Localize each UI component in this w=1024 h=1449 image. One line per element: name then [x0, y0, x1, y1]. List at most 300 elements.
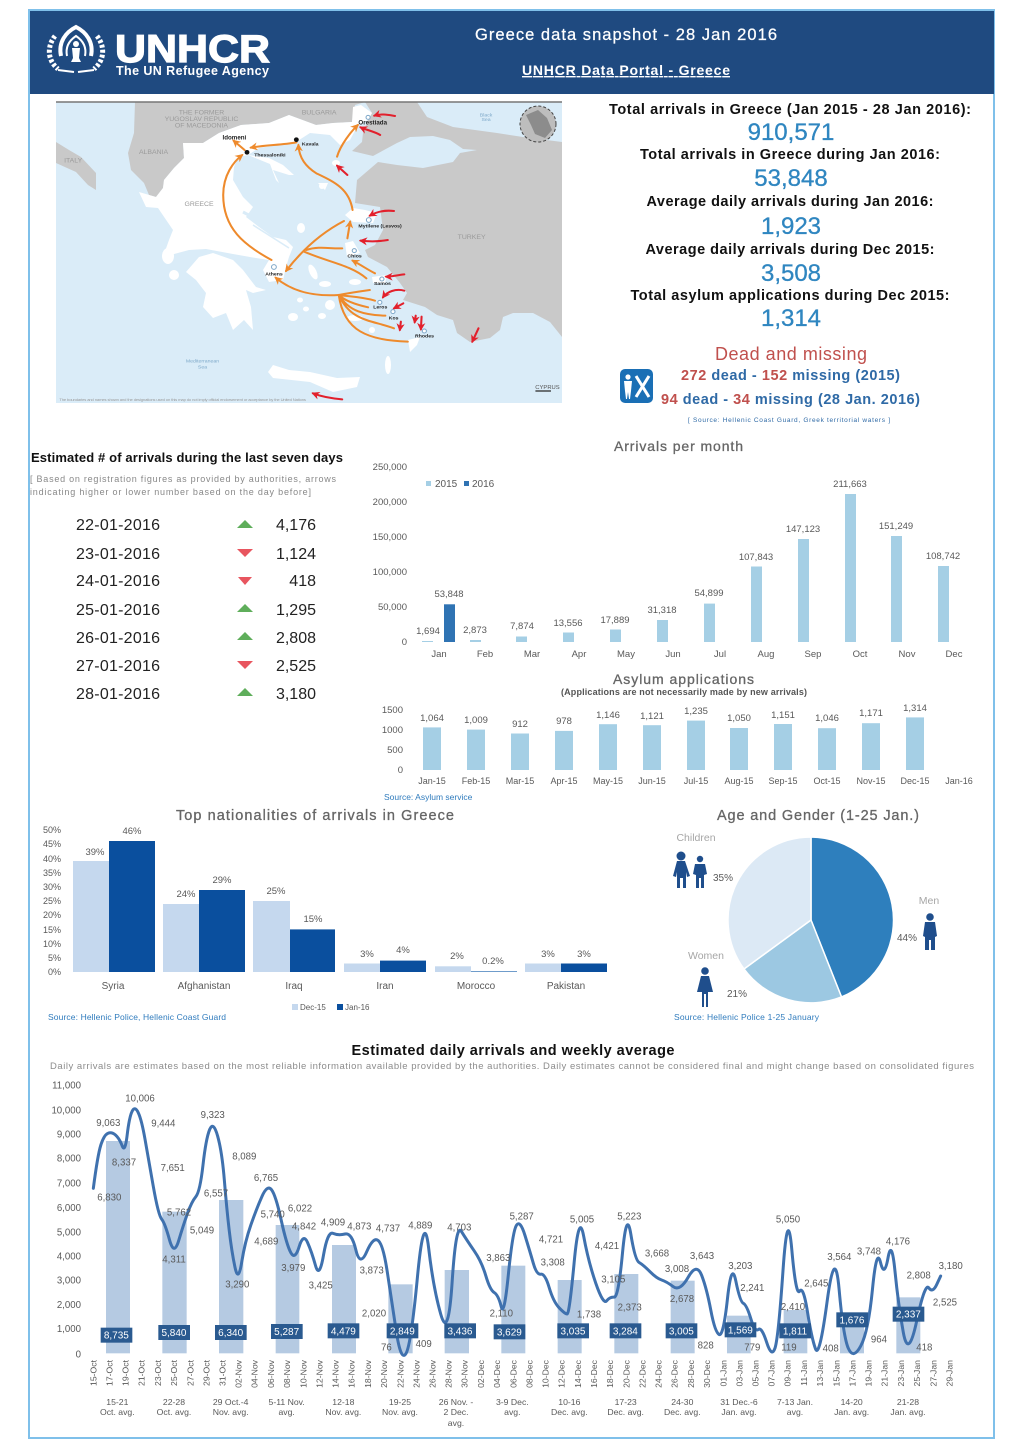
women label: Women — [688, 950, 724, 962]
average daily arrivals Jan 2016: 1,923 — [761, 213, 821, 240]
daily value labels: 1,738 — [577, 1309, 601, 1320]
month labels: Apr — [572, 649, 586, 660]
table rows: 1,124 — [276, 546, 316, 563]
date axis labels: 18-Dec — [605, 1359, 615, 1388]
month labels: Jul — [714, 649, 726, 660]
weekly axis labels: 14-20 — [841, 1397, 863, 1407]
asylum value labels: 1,146 — [596, 710, 620, 721]
daily value labels: 828 — [698, 1340, 714, 1351]
daily value labels: 5,762 — [167, 1207, 191, 1218]
daily value labels: 408 — [823, 1343, 839, 1354]
icon: UNHCR logo — [49, 27, 103, 72]
table rows: 22-01-2016 — [76, 517, 160, 534]
nationalities value labels: 29% — [212, 875, 232, 886]
weekly axis labels: 31 Dec.-6 — [720, 1397, 758, 1407]
total arrivals Jan 2016: 53,848 — [754, 165, 828, 192]
dead and missing block — [620, 344, 920, 424]
table rows: 23-01-2016 — [76, 546, 160, 563]
nationalities value labels — [85, 826, 591, 967]
weekly average values: 5,840 — [161, 1328, 187, 1339]
nationalities y axis: 20% — [43, 910, 61, 920]
asylum month labels — [418, 776, 973, 786]
nationalities y axis: 30% — [43, 882, 61, 892]
daily value labels: 418 — [916, 1342, 932, 1353]
nationalities value labels: 2% — [450, 951, 464, 962]
nationalities y axis: 45% — [43, 839, 61, 849]
date axis labels: 15-Jan — [831, 1360, 841, 1386]
date axis labels: 21-Jan — [880, 1360, 890, 1386]
dead and missing 2016: 94 dead - 34 missing (28 Jan. 2016) — [661, 392, 920, 408]
weekly axis labels: 5-11 Nov. — [269, 1397, 305, 1407]
legend — [426, 479, 495, 490]
date axis labels: 12-Dec — [557, 1359, 567, 1388]
route arrows and place names: Athens — [265, 271, 283, 277]
date axis labels: 16-Nov — [347, 1359, 357, 1388]
date axis labels: 07-Jan — [767, 1360, 777, 1386]
monthly value labels: 107,843 — [739, 552, 773, 563]
monthly value labels: 7,874 — [510, 621, 534, 632]
weekly average values: 5,287 — [274, 1327, 300, 1338]
weekly average values: 8,735 — [104, 1331, 129, 1342]
date axis labels: 28-Dec — [686, 1359, 696, 1388]
date axis labels: 08-Dec — [524, 1359, 534, 1388]
average daily arrivals Dec 2015: Average daily arrivals during Dec 2015: — [646, 242, 934, 258]
monthly value labels: 147,123 — [786, 524, 820, 535]
weekly axis labels: Oct. avg. — [100, 1407, 135, 1417]
table rows: 1,295 — [276, 602, 316, 619]
daily y axis: 8,000 — [57, 1153, 81, 1164]
asylum value labels: 978 — [556, 716, 572, 727]
daily y axis: 2,000 — [57, 1300, 81, 1311]
total arrivals since Jan 2015: 910,571 — [748, 119, 834, 146]
weekly axis labels: Oct. avg. — [157, 1407, 191, 1417]
table rows: 2,525 — [276, 658, 316, 675]
weekly average values: 4,479 — [331, 1326, 356, 1337]
arrivals chart title: Arrivals per month — [614, 438, 743, 454]
weekly axis labels: avg. — [278, 1407, 295, 1417]
chart heading: daily arrivals — [50, 1043, 974, 1072]
asylum month labels: May-15 — [593, 776, 623, 786]
men label: 44% — [897, 933, 917, 944]
nationalities category labels — [102, 981, 585, 992]
asylum month labels: Jan-15 — [418, 776, 446, 786]
weekly axis labels: 7-13 Jan. — [777, 1397, 813, 1407]
daily value labels: 3,873 — [360, 1265, 384, 1276]
weekly axis labels: 10-16 — [558, 1397, 581, 1407]
route arrows and place names: Sea — [198, 364, 207, 370]
nationalities y axis: 10% — [43, 939, 61, 949]
date axis labels: 14-Dec — [573, 1359, 583, 1388]
asylum month labels: Jan-16 — [945, 776, 973, 786]
y axis labels: 250,000 — [373, 462, 407, 473]
women label: 21% — [727, 989, 747, 1000]
y axis labels: 100,000 — [373, 567, 407, 578]
date axis labels: 31-Oct — [218, 1359, 228, 1386]
month labels: Nov — [899, 649, 916, 660]
weekly axis labels — [100, 1397, 926, 1428]
date axis labels: 08-Nov — [282, 1359, 292, 1388]
route arrows and place names: Black — [480, 113, 493, 119]
icon: man — [923, 913, 937, 950]
last seven days table — [30, 450, 343, 703]
daily value labels: 119 — [781, 1342, 797, 1353]
table rows: 28-01-2016 — [76, 686, 160, 703]
monthly bars — [422, 494, 949, 642]
daily value labels: 2,110 — [490, 1308, 513, 1319]
daily value labels: 5,049 — [190, 1226, 214, 1237]
route arrows and place names: YUGOSLAV REPUBLIC — [165, 116, 238, 123]
date axis labels: 24-Dec — [654, 1359, 664, 1388]
date axis labels: 23-Jan — [896, 1360, 906, 1386]
daily y axis: 6,000 — [57, 1203, 81, 1214]
route arrows and place names: Rhodes — [415, 333, 434, 339]
daily chart note: Daily arrivals are estimates based on the most reliable information available provided by the authorities. Daily estimates cannot be considered final and might change based on consolidated figures — [50, 1061, 974, 1072]
route arrows and place names: Idomeni — [223, 135, 247, 142]
weekly average values: 1,811 — [783, 1326, 808, 1337]
daily value labels: 3,105 — [601, 1274, 625, 1285]
daily value labels: 9,063 — [96, 1118, 120, 1129]
weekly average values: 2,337 — [896, 1310, 921, 1321]
weekly average values — [104, 1310, 921, 1342]
asylum y axis: 1000 — [382, 725, 403, 736]
weekly average values: 6,340 — [218, 1328, 244, 1339]
daily y axis — [51, 1081, 81, 1360]
trend arrows — [237, 520, 253, 696]
route arrows and place names: ITALY — [64, 158, 83, 165]
weekly axis labels: 12-18 — [332, 1397, 355, 1407]
month labels: Mar — [524, 649, 540, 660]
month labels: May — [617, 649, 635, 660]
weekly axis labels: 26 Nov. - — [439, 1397, 473, 1407]
weekly axis labels: Jan. avg. — [721, 1407, 757, 1417]
chart: asylum applications — [382, 671, 973, 802]
men label — [897, 895, 939, 944]
route arrows and place names: Mediterranean — [186, 359, 219, 365]
nationalities y axis: 0% — [48, 967, 61, 977]
Dec-15 bars — [73, 861, 561, 972]
weekly axis labels: 17-23 — [615, 1397, 637, 1407]
daily y axis: 3,000 — [57, 1276, 81, 1287]
weekly axis labels: Nov. avg. — [213, 1407, 249, 1417]
monthly value labels: 31,318 — [647, 605, 677, 616]
route arrows and place names — [59, 109, 560, 402]
route arrows and place names: ALBANIA — [139, 149, 169, 156]
daily y axis: 5,000 — [57, 1227, 81, 1238]
nationalities category labels: Iraq — [285, 981, 303, 992]
daily value labels: 4,421 — [595, 1241, 619, 1252]
nationalities value labels: 25% — [266, 886, 286, 897]
date axis labels: 19-Oct — [121, 1359, 131, 1386]
nationalities value labels: 15% — [303, 914, 323, 925]
daily value labels: 3,425 — [309, 1281, 333, 1292]
weekly axis labels: avg. — [448, 1418, 464, 1428]
daily value labels: 3,748 — [857, 1247, 881, 1258]
date axis labels: 06-Dec — [508, 1359, 518, 1388]
asylum month labels: Aug-15 — [724, 776, 754, 786]
nationalities value labels: 3% — [360, 949, 374, 960]
icon: dead and missing — [620, 369, 653, 403]
nationalities value labels: 0.2% — [482, 956, 504, 967]
asylum value labels: 1,046 — [815, 713, 839, 724]
y axis labels: 150,000 — [373, 532, 407, 543]
date axis labels: 16-Dec — [589, 1359, 599, 1388]
date axis labels: 22-Dec — [637, 1359, 647, 1388]
asylum value labels: 1,171 — [859, 708, 883, 719]
asylum applications Dec 2015: 1,314 — [761, 305, 821, 332]
date axis labels: 29-Jan — [944, 1360, 954, 1386]
date axis labels: 11-Jan — [799, 1360, 809, 1386]
nationalities value labels: 4% — [396, 945, 410, 956]
daily value labels: 3,643 — [690, 1251, 714, 1262]
y axis labels: 200,000 — [373, 497, 407, 508]
month labels — [431, 649, 963, 660]
daily value labels: 2,373 — [618, 1303, 642, 1314]
total arrivals since Jan 2015 — [609, 102, 971, 146]
asylum value labels: 912 — [512, 719, 528, 730]
date axis labels: 09-Jan — [783, 1360, 793, 1386]
weekly average values: 3,436 — [447, 1326, 473, 1337]
daily value labels: 964 — [871, 1335, 888, 1346]
weekly average values: 1,676 — [839, 1315, 865, 1326]
weekly average values: 3,005 — [669, 1326, 694, 1337]
daily value labels: 4,909 — [321, 1218, 345, 1229]
table heading: Estimated # of arrivals during the last seven days — [31, 450, 343, 465]
total arrivals since Jan 2015: Total arrivals in Greece (Jan 2015 - 28 Jan 2016): — [609, 102, 971, 118]
route arrows and place names: BULGARIA — [302, 109, 337, 116]
daily value labels: 4,689 — [254, 1237, 278, 1248]
weekly axis labels: Jan. avg. — [890, 1407, 926, 1417]
weekly average values: 1,569 — [728, 1325, 753, 1336]
daily value labels: 4,311 — [162, 1254, 186, 1265]
weekly average boxes — [101, 1307, 924, 1343]
route arrows and place names: Leros — [373, 304, 388, 310]
route arrows and place names: Thessaloniki — [254, 153, 286, 159]
daily value labels: 779 — [744, 1342, 760, 1353]
asylum value labels: 1,235 — [684, 706, 708, 717]
monthly value labels: 54,899 — [694, 588, 724, 599]
daily value labels: 4,873 — [347, 1221, 371, 1232]
header banner — [30, 11, 994, 94]
asylum month labels: Jul-15 — [684, 776, 708, 786]
weekly axis labels: avg. — [787, 1407, 803, 1417]
title: Greece data snapshot - 28 Jan 2016 — [475, 26, 777, 44]
asylum y axis: 500 — [387, 745, 403, 756]
route arrows and place names: CYPRUS — [535, 385, 560, 391]
nationalities y axis: 25% — [43, 896, 61, 906]
table rows: 26-01-2016 — [76, 630, 160, 647]
daily value labels: 76 — [381, 1342, 392, 1353]
monthly value labels — [416, 479, 960, 637]
nationalities value labels: 3% — [577, 949, 591, 960]
asylum value labels: 1,050 — [727, 713, 751, 724]
monthly value labels: 108,742 — [926, 551, 960, 562]
weekly axis labels: avg. — [504, 1407, 521, 1417]
daily arrivals line — [93, 1109, 941, 1355]
map: routes through Greece — [56, 102, 562, 403]
nationalities value labels: 24% — [176, 889, 196, 900]
table rows: 418 — [289, 573, 316, 590]
weekly axis labels: 22-28 — [163, 1397, 185, 1407]
legend: 2015 — [435, 479, 458, 490]
route arrows and place names: Kavala — [302, 142, 319, 148]
daily value labels: 3,008 — [665, 1264, 689, 1275]
daily value labels: 4,703 — [447, 1222, 471, 1233]
daily value labels: 4,889 — [408, 1220, 432, 1231]
legend: 2016 — [472, 479, 495, 490]
date axis labels: 20-Nov — [379, 1359, 389, 1388]
daily value labels: 2,678 — [670, 1294, 694, 1305]
daily value labels: 5,005 — [570, 1215, 594, 1226]
monthly value labels: 17,889 — [600, 615, 630, 626]
pie title: Age and Gender (1-25 Jan.) — [717, 808, 919, 824]
asylum y axis — [382, 705, 403, 776]
asylum subtitle: (Applications are not necessarily made by new arrivals) — [561, 687, 807, 697]
asylum month labels: Nov-15 — [856, 776, 886, 786]
date axis labels: 23-Oct — [153, 1359, 163, 1386]
daily y axis: 11,000 — [52, 1081, 81, 1092]
dead and missing source: [ Source: Hellenic Coast Guard, Greek territorial waters ] — [688, 417, 890, 424]
asylum applications Dec 2015: Total asylum applications during Dec 2015: — [630, 288, 950, 304]
chart: arrivals per month — [373, 438, 963, 660]
daily value labels: 3,979 — [281, 1263, 305, 1274]
date axis labels: 10-Nov — [298, 1359, 308, 1388]
date axis labels: 24-Nov — [411, 1359, 421, 1388]
date axis labels: 19-Jan — [864, 1360, 874, 1386]
daily value labels: 2,241 — [740, 1283, 764, 1294]
table rows — [76, 517, 316, 703]
daily value labels: 6,830 — [97, 1193, 121, 1204]
weekly axis labels: Jan. avg. — [834, 1407, 869, 1417]
nationalities value labels: 3% — [541, 949, 555, 960]
y axis labels: 0 — [402, 637, 407, 648]
date axis labels: 10-Dec — [541, 1359, 551, 1388]
y axis labels: 50,000 — [378, 602, 407, 613]
date axis labels: 26-Dec — [670, 1359, 680, 1388]
nationalities value labels: 39% — [85, 847, 105, 858]
date axis labels: 12-Nov — [314, 1359, 324, 1388]
date axis labels: 14-Nov — [331, 1359, 341, 1388]
asylum value labels — [420, 703, 927, 730]
monthly value labels: 2,873 — [463, 625, 487, 636]
weekly axis labels: 21-28 — [897, 1397, 919, 1407]
daily value labels: 3,180 — [939, 1261, 963, 1272]
asylum month labels: Oct-15 — [813, 776, 841, 786]
asylum y axis: 1500 — [382, 705, 403, 716]
asylum month labels: Mar-15 — [506, 776, 534, 786]
monthly value labels: 151,249 — [879, 521, 913, 532]
table rows: 4,176 — [276, 517, 316, 534]
date axis labels — [88, 1359, 954, 1388]
daily value labels: 7,651 — [161, 1163, 185, 1174]
date axis labels: 05-Jan — [751, 1360, 761, 1386]
date axis labels: 25-Oct — [169, 1359, 179, 1386]
daily value labels: 5,287 — [510, 1211, 534, 1222]
asylum value labels: 1,121 — [640, 711, 664, 722]
month labels: Jun — [665, 649, 681, 660]
monthly value labels: 13,556 — [553, 618, 583, 629]
nationalities category labels: Syria — [102, 981, 125, 992]
date axis labels: 13-Jan — [815, 1360, 825, 1386]
y axis labels — [373, 462, 407, 648]
asylum value labels: 1,314 — [903, 703, 927, 714]
route arrows and place names: OF MACEDONIA — [175, 122, 229, 129]
daily y axis: 10,000 — [51, 1105, 81, 1116]
month labels: Aug — [758, 649, 774, 660]
men label: Men — [919, 895, 939, 907]
month labels: Jan — [431, 649, 447, 660]
nationalities legend: Jan-16 — [345, 1003, 370, 1012]
date axis labels: 18-Nov — [363, 1359, 373, 1388]
weekly axis labels: 29 Oct.-4 — [213, 1397, 249, 1407]
monthly value labels: 53,848 — [434, 589, 464, 600]
daily value labels: 5,050 — [776, 1215, 800, 1226]
month labels: Dec — [946, 649, 963, 660]
monthly value labels: 1,694 — [416, 626, 440, 637]
daily value labels: 4,721 — [539, 1234, 563, 1245]
nationalities source: Source: Hellenic Police, Hellenic Coast Guard — [48, 1012, 226, 1022]
date axis labels: 20-Dec — [621, 1359, 631, 1388]
logo wordmark: The UN Refugee Agency — [116, 64, 269, 78]
daily value labels: 2,525 — [933, 1298, 957, 1309]
pie source: Source: Hellenic Police 1-25 January — [674, 1012, 820, 1022]
average daily arrivals Jan 2016 — [646, 194, 934, 240]
table rows: 27-01-2016 — [76, 658, 160, 675]
nationalities category labels: Morocco — [457, 981, 496, 992]
Jan-16 bars — [109, 841, 607, 972]
nationalities legend: Dec-15 — [300, 1003, 326, 1012]
nationalities y axis: 50% — [43, 825, 61, 835]
children label — [676, 832, 733, 884]
asylum value labels: 1,151 — [771, 710, 795, 721]
weekly axis labels: 2 Dec. — [443, 1407, 469, 1417]
date axis labels: 30-Dec — [702, 1359, 712, 1388]
nationalities y axis: 5% — [48, 953, 61, 963]
nationalities y axis — [43, 825, 61, 977]
nationalities y axis: 40% — [43, 854, 61, 864]
asylum month labels: Jun-15 — [638, 776, 666, 786]
asylum bars — [423, 717, 924, 770]
daily value labels: 4,842 — [292, 1221, 316, 1232]
daily value labels: 4,176 — [886, 1237, 910, 1248]
date axis labels: 22-Nov — [395, 1359, 405, 1388]
weekly average values: 3,284 — [613, 1326, 638, 1337]
icon: children — [673, 852, 707, 888]
daily value labels: 5,740 — [261, 1209, 285, 1220]
weekly axis labels: Dec. avg. — [551, 1407, 588, 1417]
month labels: Sep — [805, 649, 821, 660]
date axis labels: 27-Jan — [928, 1360, 938, 1386]
nationalities legend — [292, 1003, 370, 1012]
date axis labels: 01-Jan — [718, 1360, 728, 1386]
month labels: Feb — [477, 649, 493, 660]
asylum month labels: Sep-15 — [768, 776, 798, 786]
daily value labels: 3,564 — [827, 1252, 852, 1263]
route arrows and place names: Sea — [481, 117, 491, 123]
icon: woman — [697, 967, 713, 1007]
daily value labels — [96, 1094, 963, 1354]
chart: age and gender pie — [673, 808, 939, 1022]
nationalities title: Top nationalities of arrivals in Greece — [176, 808, 454, 824]
date axis labels: 29-Oct — [201, 1359, 211, 1386]
average daily arrivals Jan 2016: Average daily arrivals during Jan 2016: — [646, 194, 934, 210]
daily value labels: 4,737 — [376, 1223, 400, 1234]
weekly axis labels: Nov. avg. — [382, 1407, 418, 1417]
chart heading: daily arrivals: Estimated daily arrivals and weekly average — [352, 1043, 674, 1059]
nationalities category labels: Pakistan — [547, 981, 585, 992]
daily value labels: 8,337 — [112, 1157, 136, 1168]
daily value labels: 409 — [416, 1339, 432, 1350]
table rows: 3,180 — [276, 686, 316, 703]
